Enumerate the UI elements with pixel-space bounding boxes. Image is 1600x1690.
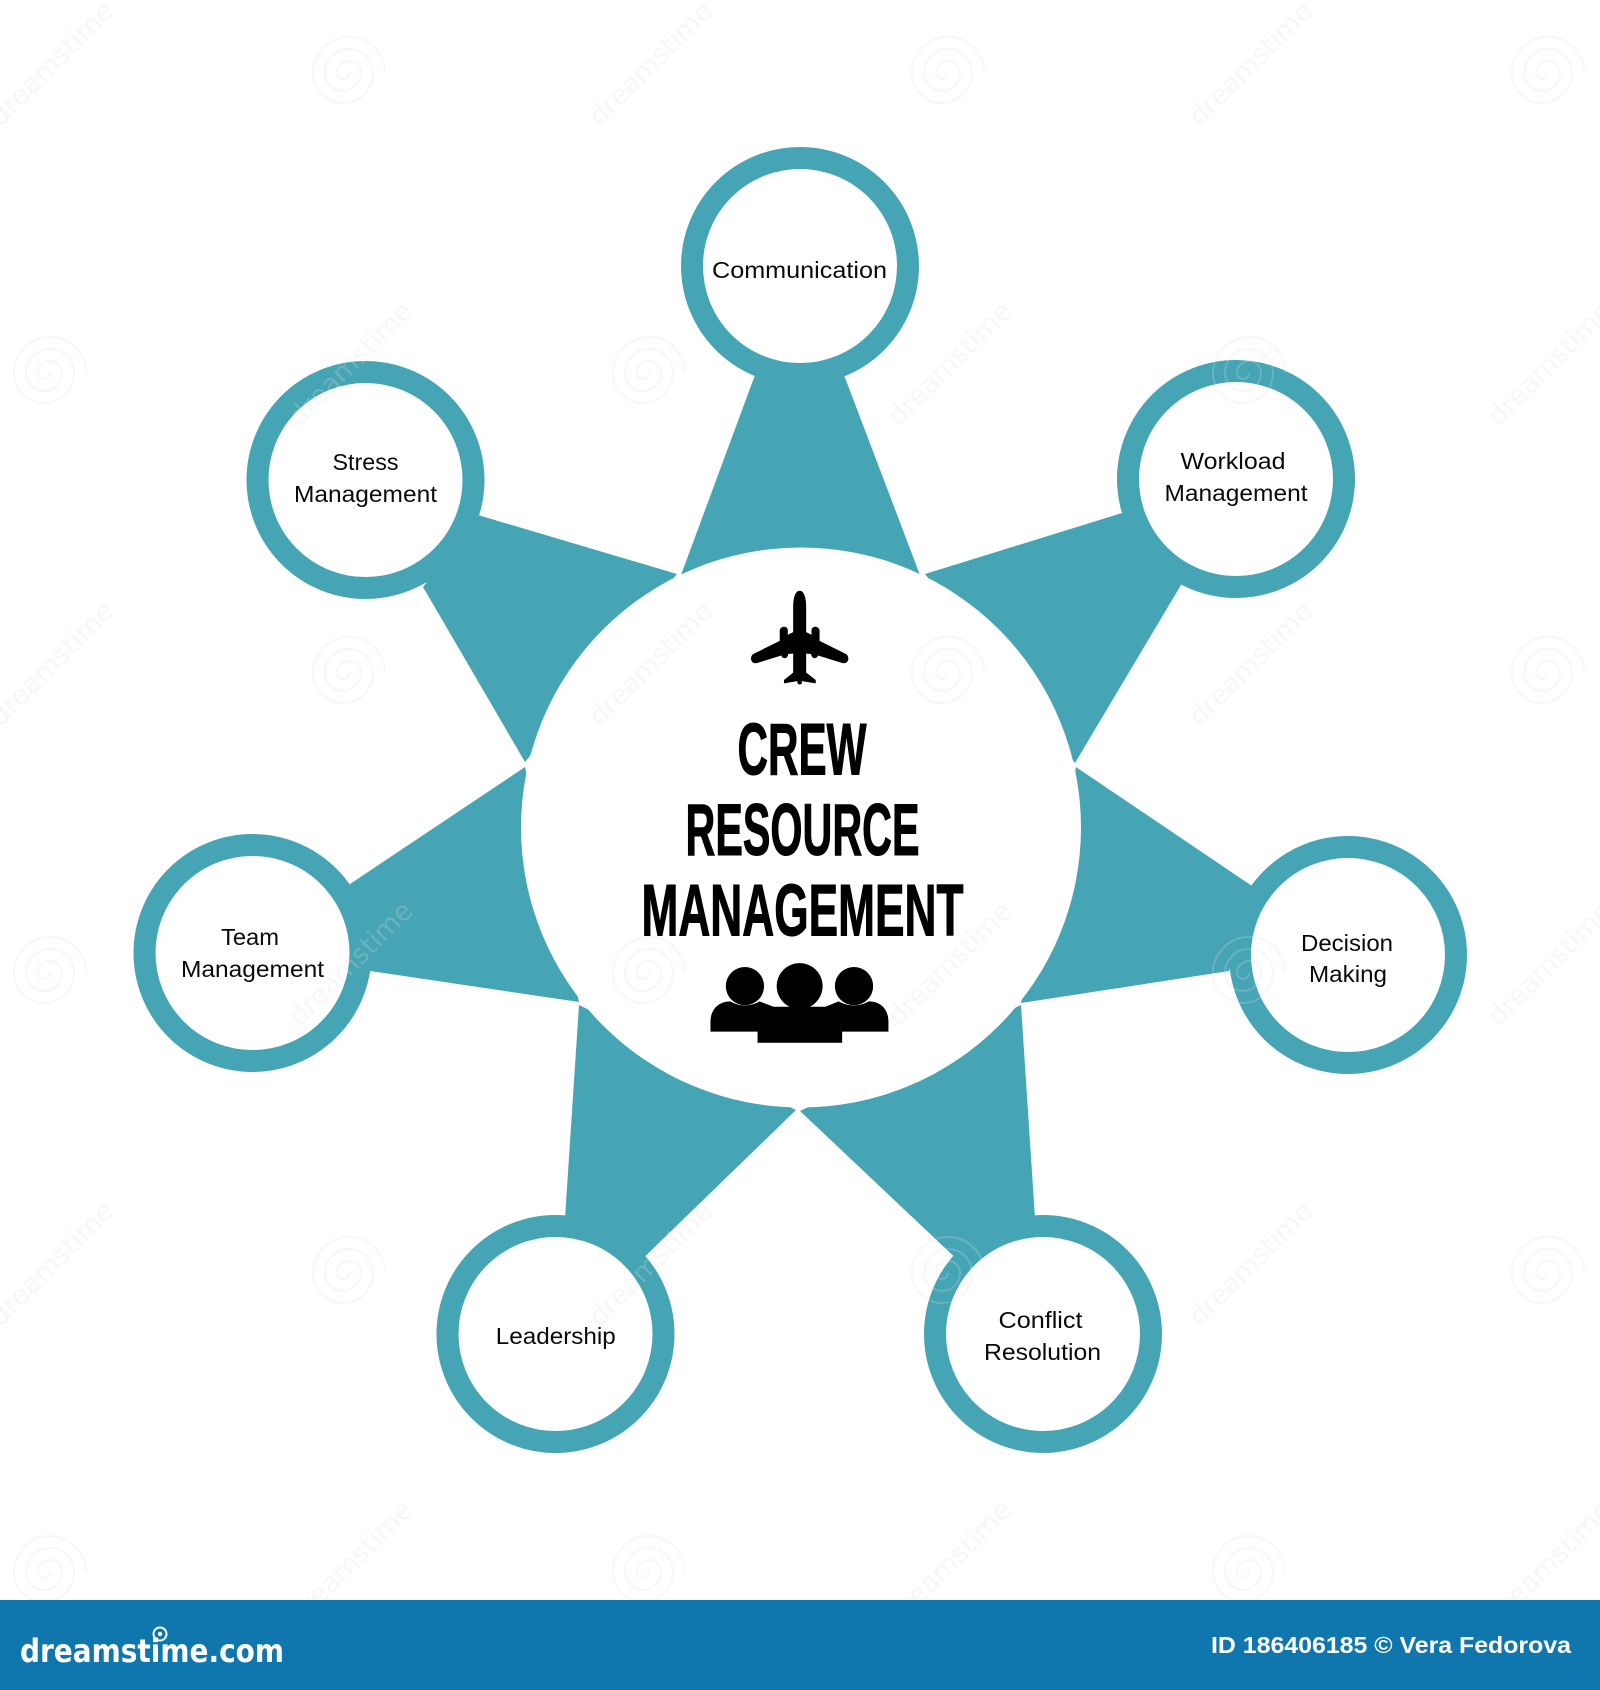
icon: crew people	[710, 963, 888, 1043]
label: Decision Making	[1301, 930, 1393, 987]
watermark: dreamstime text: dreamstime	[882, 1495, 1018, 1631]
ring: Stress Management	[258, 372, 474, 588]
ring: Conflict Resolution	[935, 1226, 1151, 1442]
label: Stress Management: Stress	[332, 449, 398, 475]
label: Stress Management	[294, 449, 437, 507]
label: Team Management: Management	[181, 956, 324, 982]
footer credit: ID 186406185 © Vera Fedorova	[1211, 1632, 1571, 1658]
watermark: dreamstime text: dreamstime	[1183, 596, 1319, 732]
wedge: Conflict Resolution	[800, 1005, 1035, 1300]
watermark: dreamstime text: dreamstime	[283, 296, 419, 432]
label: Decision Making: Making	[1309, 961, 1387, 987]
label: Team Management	[181, 924, 324, 982]
wedge: Workload Management	[925, 513, 1181, 763]
icon: airplane	[751, 591, 848, 685]
watermark: dreamstime text: dreamstime	[283, 896, 419, 1032]
label: Conflict Resolution	[984, 1307, 1101, 1365]
watermark: dreamstime text: dreamstime	[882, 896, 1018, 1032]
ring: Workload Management	[1128, 371, 1344, 587]
label: Stress Management: Management	[294, 481, 437, 507]
label: Leadership: Leadership	[496, 1323, 616, 1349]
wedge: Communication	[681, 375, 920, 575]
wedge: Leadership	[565, 1005, 796, 1300]
footer bar	[0, 1600, 1600, 1690]
footer logo: dreamstime.com: dreamstime.com	[20, 1632, 284, 1670]
title: Crew Resource Management: RESOURCE	[686, 790, 920, 871]
watermark: dreamstime text: dreamstime	[583, 596, 719, 732]
wedge: Team Management	[350, 767, 579, 1002]
label: Conflict Resolution: Resolution	[984, 1339, 1101, 1365]
watermark: dreamstime text: dreamstime	[1183, 1196, 1319, 1332]
title: Crew Resource Management: CREW	[738, 710, 867, 790]
label: Conflict Resolution: Conflict	[998, 1307, 1083, 1333]
ring: Communication	[692, 158, 908, 374]
watermark: dreamstime text: dreamstime	[583, 1196, 719, 1332]
label: Decision Making: Decision	[1301, 930, 1393, 956]
label: Communication: Communication	[712, 257, 887, 283]
wedge: Decision Making	[1021, 767, 1252, 1003]
label: Workload Management: Management	[1164, 480, 1308, 506]
ring: Team Management	[144, 845, 360, 1061]
ring: Decision Making	[1240, 847, 1456, 1063]
label: Workload Management	[1164, 448, 1308, 506]
label: Workload Management: Workload	[1180, 448, 1286, 474]
wedge: Stress Management	[423, 515, 677, 762]
label: Team Management: Team	[221, 924, 279, 950]
title: Crew Resource Management	[642, 710, 964, 952]
central circle	[521, 548, 1081, 1108]
watermark: dreamstime text: dreamstime	[882, 296, 1018, 432]
ring: Leadership	[448, 1226, 664, 1442]
watermark: dreamstime text: dreamstime	[283, 1495, 419, 1631]
title: Crew Resource Management: MANAGEMENT	[642, 870, 964, 952]
